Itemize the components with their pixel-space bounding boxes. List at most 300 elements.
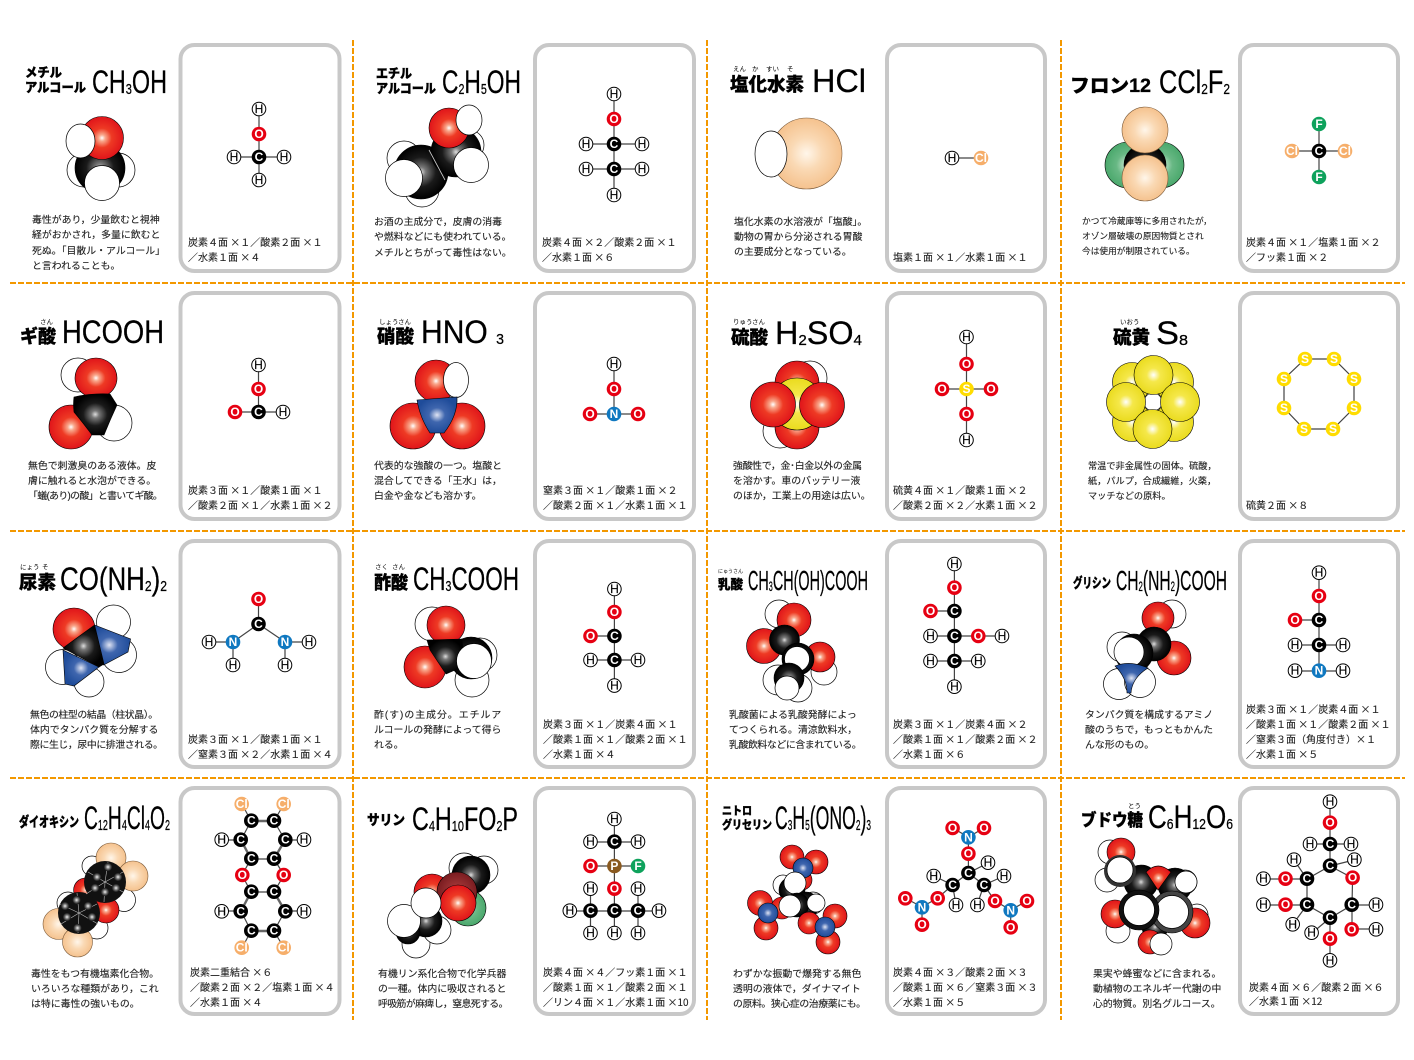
model: formic acid — [49, 358, 132, 449]
panel: structure: H — [1315, 566, 1323, 580]
title: 乳酸 CH3CH(OH)COOH: CH(OH)COOH — [773, 565, 868, 596]
title: サリン C4H10FO2P: 10 — [452, 818, 464, 835]
panel: structure: ／酸素１面 ×１／酸素２面 ×１ — [543, 979, 687, 994]
title: エチルアルコール C2H5OH: 2 — [458, 81, 464, 98]
panel: structure: O — [609, 112, 619, 126]
description: 毒性をもつ有機塩素化合物。 — [31, 967, 159, 980]
panel: structure: H — [1339, 664, 1347, 678]
panel: structure: ／水素１面 ×４ — [543, 746, 615, 761]
panel: structure: N — [229, 635, 237, 649]
panel: structure — [535, 788, 694, 1014]
title: サリン C4H10FO2P: C — [412, 801, 435, 837]
panel: structure: ／酸素２面 ×１／水素１面 ×２ — [188, 497, 332, 512]
title: 硫黄 S8: S — [1156, 315, 1177, 351]
panel: structure — [1240, 788, 1398, 1014]
panel: structure: N — [1315, 664, 1323, 678]
panel: structure: H — [1347, 837, 1355, 851]
panel: structure — [1240, 293, 1398, 519]
panel: structure: S — [1350, 372, 1358, 386]
title: 酢酸 CH3COOH — [374, 561, 519, 597]
panel: structure: O — [610, 882, 619, 896]
panel: structure: O — [279, 868, 288, 882]
title: グリシン CH2(NH2)COOH: CH — [1116, 565, 1156, 596]
panel: structure: F — [1315, 117, 1323, 131]
panel: structure: O — [238, 868, 247, 882]
panel: structure: C — [1315, 638, 1324, 652]
description: 代表的な強酸の一つ。塩酸と — [374, 459, 502, 472]
description: 有機リン系化合物で化学兵器 — [378, 967, 507, 980]
panel: structure: Cl — [1286, 144, 1298, 158]
panel: structure — [180, 541, 340, 767]
panel: structure: H — [610, 926, 619, 940]
panel: structure: C — [236, 833, 245, 847]
panel: structure: C — [610, 629, 619, 643]
title: 硝酸 HNO3: しょう — [379, 316, 398, 326]
panel: structure: O — [962, 357, 971, 371]
panel: structure — [535, 293, 694, 519]
title: 硫黄 S8: 8 — [1179, 332, 1188, 349]
description: 乳酸飲料などに含まれている。 — [729, 738, 861, 751]
panel: structure: 炭素二重結合 ×６ — [190, 964, 272, 979]
title: 塩化水素 HCl: そ — [787, 63, 794, 73]
panel: structure: C — [964, 866, 973, 880]
title: ニトログリセリン C3H5(ONO2)3: 5 — [805, 817, 810, 834]
panel: structure: ／水素１面 ×６ — [893, 746, 965, 761]
panel: structure: ／酸素２面 ×２／塩素１面 ×４ — [190, 979, 334, 994]
title: サリン C4H10FO2P: サリン — [367, 812, 405, 828]
title: 塩化水素 HCl: HCl — [812, 63, 866, 99]
title: ブドウ糖 C6H12O6: 12 — [1192, 816, 1206, 833]
title: エチルアルコール C2H5OH: 5 — [481, 81, 487, 98]
panel: structure: H — [638, 162, 646, 176]
title: フロン12 CCl2F2: CCl — [1159, 64, 1212, 100]
title: 酢酸 CH3COOH: さん — [392, 561, 406, 571]
panel: structure — [887, 541, 1045, 767]
panel: structure: H — [255, 102, 263, 116]
description: 酢(す)の主成分。エチルア — [374, 708, 502, 721]
panel: structure: C — [610, 162, 619, 176]
title: 酢酸 CH3COOH: さく — [375, 561, 388, 571]
title: 尿素 CO(NH2)2: ) — [152, 561, 160, 597]
description: 体内でタンパク質を分解する — [30, 723, 158, 736]
model: sulfuric acid — [750, 361, 844, 449]
title: ギ酸 HCOOH: HCOOH — [62, 314, 164, 350]
card: nitroglycerin — [722, 788, 1045, 1014]
title: ニトログリセリン C3H5(ONO2)3: H — [792, 800, 805, 836]
description: 無色で刺激臭のある液体。皮 — [28, 459, 157, 472]
panel: structure: N — [281, 635, 289, 649]
title: 尿素 CO(NH2)2: 2 — [160, 578, 167, 595]
panel: structure: F — [634, 859, 642, 873]
description: いろいろな種類があり，これ — [31, 982, 159, 995]
panel: structure — [180, 45, 340, 271]
title: メチルアルコール CH3OH: OH — [132, 64, 167, 100]
panel: structure: H — [655, 904, 663, 918]
panel: structure: H — [1350, 853, 1359, 867]
panel: structure: 炭素３面 ×１／炭素４面 ×１ — [543, 716, 677, 731]
panel: structure: 炭素３面 ×１／酸素１面 ×１ — [188, 731, 322, 746]
panel: structure: N — [918, 900, 926, 914]
panel: structure: H — [998, 629, 1006, 643]
title: 硫酸 H2SO4: H — [775, 315, 798, 351]
title: 硫酸 H2SO4: 4 — [854, 332, 862, 349]
panel: structure: O — [1348, 871, 1357, 885]
title: ダイオキシン C12H4Cl4O2: O — [150, 800, 165, 836]
panel: structure: H — [1259, 898, 1268, 912]
panel: structure: ／酸素１面 ×６／窒素３面 ×３ — [893, 979, 1037, 994]
panel: structure: H — [586, 835, 595, 849]
panel: structure: ／水素１面 ×５ — [1246, 746, 1318, 761]
panel: structure: C — [270, 852, 279, 866]
panel: structure: S — [1300, 422, 1308, 436]
panel: structure: 硫黄２面 ×８ — [1246, 497, 1308, 512]
panel: structure: H — [974, 654, 983, 668]
panel: structure: C — [980, 878, 989, 892]
description: わずかな振動で爆発する無色 — [733, 967, 862, 980]
panel: structure: P — [610, 859, 618, 873]
panel: structure: H — [1290, 853, 1298, 867]
title: 尿素 CO(NH2)2: 2 — [145, 578, 152, 595]
panel: structure: S — [1350, 401, 1358, 415]
panel: structure: O — [1347, 922, 1356, 936]
panel: structure: O — [586, 859, 595, 873]
model: glycine — [1104, 600, 1191, 700]
panel: structure: ／酸素２面 ×１／水素１面 ×１ — [543, 497, 687, 512]
panel: structure: C — [586, 904, 595, 918]
panel: structure: O — [609, 382, 619, 396]
description: 動物の胃から分泌される胃酸 — [734, 230, 863, 243]
panel: structure: H — [952, 898, 960, 912]
card: sarin — [367, 788, 694, 1014]
panel: structure: O — [962, 407, 971, 421]
panel: structure: H — [634, 926, 642, 940]
panel: structure — [180, 293, 340, 519]
model: HCl — [755, 118, 842, 189]
title: エチルアルコール C2H5OH: C — [442, 64, 465, 100]
panel: structure: C — [1303, 872, 1312, 886]
model: glucose — [1095, 838, 1210, 955]
description: や燃料などにも使われている。 — [374, 230, 511, 243]
model: methanol — [66, 116, 135, 200]
panel: structure: H — [950, 557, 959, 571]
panel: structure: H — [217, 904, 226, 918]
card: sulfur — [1088, 293, 1398, 519]
card: formic acid — [20, 293, 340, 519]
title: ブドウ糖 C6H12O6: ブドウ糖 — [1081, 810, 1143, 830]
panel: structure: C — [1315, 144, 1324, 158]
card: hydrogen chloride — [730, 45, 1045, 271]
description: 死ぬ。「目散ル・アルコール」 — [32, 244, 165, 257]
title: ダイオキシン C12H4Cl4O2: Cl — [127, 800, 145, 836]
description: 白金や金なども溶かす。 — [374, 489, 482, 502]
title: ブドウ糖 C6H12O6: C — [1148, 799, 1171, 835]
description: 強酸性で，金･白金以外の金属 — [733, 459, 862, 472]
panel: structure: C — [950, 604, 959, 618]
title: 尿素 CO(NH2)2: そ — [42, 561, 48, 571]
description: 酸のうちで，もっともかんた — [1085, 723, 1213, 736]
title: グリシン CH2(NH2)COOH: (NH — [1143, 565, 1171, 596]
panel: structure: C — [634, 904, 643, 918]
panel: structure: O — [964, 847, 973, 861]
title: ギ酸 HCOOH: ギ酸 — [20, 326, 56, 347]
panel: structure: H — [1372, 898, 1380, 912]
panel: structure: H — [1288, 917, 1297, 931]
card: freon 12 — [1070, 45, 1398, 271]
panel: structure: Cl — [278, 797, 290, 811]
panel: structure: H — [300, 833, 308, 847]
panel: structure: H — [926, 654, 935, 668]
panel: structure — [1240, 541, 1398, 767]
title: 硫酸 H2SO4 — [731, 315, 862, 351]
panel: structure: H — [255, 173, 263, 187]
panel: structure: O — [254, 592, 263, 606]
title: エチルアルコール C2H5OH: エチル — [376, 66, 412, 81]
title: ブドウ糖 C6H12O6 — [1081, 799, 1233, 835]
title: 硝酸 HNO3: HNO — [421, 314, 492, 350]
panel: structure: O — [917, 918, 927, 932]
panel: structure: H — [610, 87, 618, 101]
title: 硝酸 HNO3 — [377, 314, 504, 350]
description: オゾン層破壊の原因物質とされ — [1082, 230, 1204, 241]
panel: structure: H — [634, 835, 642, 849]
panel: structure: C — [247, 814, 256, 828]
panel: structure: C — [610, 137, 619, 151]
title: 尿素 CO(NH2)2: CO(NH — [60, 561, 165, 597]
title: エチルアルコール C2H5OH — [376, 64, 521, 100]
panel: structure: O — [1022, 894, 1032, 908]
description: を溶かす。車のバッテリー液 — [733, 474, 861, 487]
panel: structure: N — [1006, 903, 1015, 917]
title: 硫黄 S8 — [1113, 315, 1188, 351]
panel: structure: H — [229, 658, 237, 672]
panel: structure: C — [610, 904, 619, 918]
description: 常温で非金属性の固体。硫酸， — [1088, 460, 1217, 471]
panel: structure: H — [929, 869, 938, 883]
title: ダイオキシン C12H4Cl4O2: ダイオキシン — [19, 814, 79, 830]
model: lactic acid — [746, 600, 837, 702]
panel: structure: H — [1307, 926, 1316, 940]
model: sulfur — [1106, 356, 1200, 448]
title: 塩化水素 HCl — [730, 63, 866, 99]
panel: structure: H — [926, 629, 935, 643]
title: 塩化水素 HCl: すい — [766, 63, 779, 73]
panel: structure: H — [1372, 922, 1380, 936]
panel: structure: O — [1006, 920, 1015, 934]
model: dioxin — [43, 843, 148, 957]
panel: structure: C — [247, 852, 256, 866]
panel: structure: H — [582, 137, 590, 151]
title: サリン C4H10FO2P: P — [502, 801, 518, 837]
description: 呼吸筋が麻痺し，窒息死する。 — [378, 997, 508, 1010]
panel: structure: C — [1303, 898, 1312, 912]
panel: structure: C — [1326, 859, 1335, 873]
panel: structure: C — [610, 653, 619, 667]
panel: structure: S — [1280, 372, 1288, 386]
title: エチルアルコール C2H5OH: OH — [487, 64, 521, 100]
title: グリシン CH2(NH2)COOH: )COOH — [1175, 565, 1227, 596]
panel: structure: H — [281, 658, 289, 672]
title: フロン12 CCl2F2: 2 — [1223, 81, 1230, 98]
panel: structure: C — [247, 885, 256, 899]
description: の一種。体内に吸収されると — [378, 982, 506, 995]
card: glucose — [1081, 788, 1398, 1014]
panel: structure: H — [610, 357, 618, 371]
panel: structure: H — [280, 150, 288, 164]
description: れる。 — [374, 739, 404, 751]
title: 乳酸 CH3CH(OH)COOH: 3 — [769, 578, 773, 594]
title: フロン12 CCl2F2: F — [1208, 64, 1223, 100]
model: sarin — [388, 853, 498, 958]
panel: structure: 硫黄４面 ×１／酸素１面 ×２ — [893, 482, 1027, 497]
title: 乳酸 CH3CH(OH)COOH — [718, 565, 868, 596]
card: nitric acid — [374, 293, 694, 519]
panel: structure: 窒素３面 ×１／酸素１面 ×２ — [543, 482, 677, 497]
panel: structure: C — [254, 617, 263, 631]
panel: structure: O — [610, 605, 619, 619]
panel: structure: H — [610, 582, 619, 596]
title: ダイオキシン C12H4Cl4O2: H — [108, 800, 122, 836]
panel: structure: C — [254, 405, 263, 419]
panel: structure: H — [638, 137, 646, 151]
title: 尿素 CO(NH2)2: にょう — [20, 561, 40, 571]
description: 塩化水素の水溶液が「塩酸」。 — [734, 215, 867, 228]
title: 硫酸 H2SO4: 硫酸 — [731, 327, 768, 348]
panel: structure: C — [1315, 613, 1324, 627]
panel: structure: F — [1315, 170, 1323, 184]
panel: structure: C — [270, 814, 279, 828]
panel: structure: 炭素４面 ×１／酸素２面 ×１ — [188, 234, 322, 249]
model: acetic acid — [404, 606, 497, 697]
description: んな形のもの。 — [1085, 739, 1154, 751]
panel: structure: C — [610, 835, 619, 849]
panel: structure: C — [281, 833, 290, 847]
panel: structure: H — [1291, 664, 1299, 678]
panel: structure: ／酸素１面 ×１／酸素２面 ×１ — [1246, 716, 1390, 731]
panel: structure: ／酸素２面 ×２／水素１面 ×２ — [893, 497, 1037, 512]
title: サリン C4H10FO2P: H — [435, 801, 452, 837]
panel: structure: H — [962, 330, 971, 344]
description: と言われることも。 — [32, 260, 120, 272]
panel: structure: N — [964, 830, 973, 844]
description: タンパク質を構成するアミノ — [1085, 708, 1213, 721]
panel: structure: N — [610, 407, 618, 421]
card: ethyl alcohol — [374, 45, 694, 271]
card: sulfuric acid — [731, 293, 1045, 519]
panel: structure: S — [1280, 401, 1288, 415]
title: ニトログリセリン C3H5(ONO2)3: C — [775, 800, 798, 836]
title: ダイオキシン C12H4Cl4O2: 12 — [98, 817, 108, 834]
description: 心的物質。別名グルコース。 — [1093, 997, 1221, 1010]
panel: structure: O — [933, 891, 942, 905]
card: dioxin — [19, 788, 340, 1014]
title: グリシン CH2(NH2)COOH: グリシン — [1073, 575, 1111, 591]
title: 乳酸 CH3CH(OH)COOH: CH — [748, 565, 788, 596]
title: エチルアルコール C2H5OH: H — [464, 64, 481, 100]
panel: structure: O — [1325, 816, 1335, 830]
panel: structure: C — [950, 629, 959, 643]
model: nitric acid — [390, 360, 485, 449]
title: エチルアルコール C2H5OH: アルコール — [376, 81, 436, 96]
title: サリン C4H10FO2P — [367, 801, 518, 837]
description: メチルとちがって毒性はない。 — [374, 246, 512, 259]
panel: structure: H — [586, 653, 595, 667]
panel: structure: C — [1347, 898, 1356, 912]
panel: structure: Cl — [278, 941, 290, 955]
card: acetic acid — [374, 541, 694, 767]
description: かつて冷蔵庫等に多用されたが， — [1082, 215, 1212, 226]
title: ニトログリセリン C3H5(ONO2)3: グリセリン — [722, 817, 772, 832]
panel: structure: C — [270, 885, 279, 899]
model: ethanol — [386, 105, 488, 207]
description: 「蟻(あり)の酸」と書いてギ酸。 — [28, 489, 162, 502]
panel: structure: H — [1306, 837, 1314, 851]
description: マッチなどの原料。 — [1088, 490, 1171, 501]
panel: structure: O — [1325, 932, 1335, 946]
description: のほか，工業上の用途は広い。 — [733, 489, 871, 502]
title: 酢酸 CH3COOH: COOH — [451, 561, 519, 597]
panel: structure: O — [1281, 898, 1290, 912]
model: nitroglycerin — [748, 845, 847, 954]
panel: structure: C — [270, 924, 279, 938]
panel: structure: H — [610, 188, 618, 202]
panel: structure: ／水素１面 ×５ — [893, 994, 965, 1009]
title: 硝酸 HNO3: 3 — [496, 331, 504, 348]
title: ブドウ糖 C6H12O6: H — [1174, 799, 1192, 835]
title: 硫黄 S8: 硫黄 — [1113, 327, 1150, 348]
title: 尿素 CO(NH2)2: 尿素 — [19, 572, 56, 593]
title: 酢酸 CH3COOH: CH — [413, 561, 459, 597]
panel: structure: ／水素１面 ×12 — [1249, 993, 1323, 1008]
card: methyl alcohol — [25, 45, 340, 272]
title: ダイオキシン C12H4Cl4O2: 4 — [122, 817, 127, 834]
panel: structure: ／酸素１面 ×１／酸素２面 ×１ — [543, 731, 687, 746]
description: 経がおかされ，多量に飲むと — [32, 228, 160, 241]
description: 際に生じ，尿中に排泄される。 — [30, 738, 163, 751]
panel: structure: ／フッ素１面 ×２ — [1246, 249, 1328, 264]
panel: structure: H — [1000, 869, 1008, 883]
title: ギ酸 HCOOH — [20, 314, 164, 350]
panel: structure: Cl — [236, 941, 248, 955]
panel: structure: O — [948, 821, 957, 835]
description: の原料。狭心症の治療薬にも。 — [733, 997, 866, 1010]
panel: structure: C — [247, 924, 256, 938]
title: ブドウ糖 C6H12O6: とう — [1128, 800, 1141, 810]
panel: structure: H — [610, 812, 619, 826]
title: サリン C4H10FO2P: 4 — [429, 818, 435, 835]
panel: structure: H — [300, 904, 308, 918]
description: 毒性があり，少量飲むと視神 — [32, 213, 160, 226]
description: てつくられる。清涼飲料水， — [729, 723, 857, 736]
panel: structure: 塩素１面 ×１／水素１面 ×１ — [893, 249, 1027, 264]
title: 硝酸 HNO3: さん — [398, 316, 412, 326]
panel: structure: O — [950, 581, 959, 595]
title: ニトログリセリン C3H5(ONO2)3: 2 — [856, 817, 861, 834]
description: 紙，パルプ，合成繊維，火薬， — [1088, 475, 1216, 486]
panel: structure: O — [586, 629, 595, 643]
panel: structure: H — [1291, 638, 1299, 652]
panel: structure — [180, 788, 340, 1014]
panel: structure: H — [962, 433, 971, 447]
model: freon — [1105, 107, 1184, 201]
panel: structure: 炭素４面 ×３／酸素２面 ×３ — [893, 964, 1027, 979]
panel: structure: Cl — [975, 151, 987, 165]
description: ルコールの発酵によって得ら — [374, 723, 501, 736]
panel: structure: H — [230, 150, 238, 164]
panel: structure: O — [986, 382, 996, 396]
title: ニトログリセリン C3H5(ONO2)3: 3 — [788, 817, 792, 834]
panel: structure: O — [990, 894, 1000, 908]
title: メチルアルコール CH3OH: 3 — [126, 81, 132, 98]
